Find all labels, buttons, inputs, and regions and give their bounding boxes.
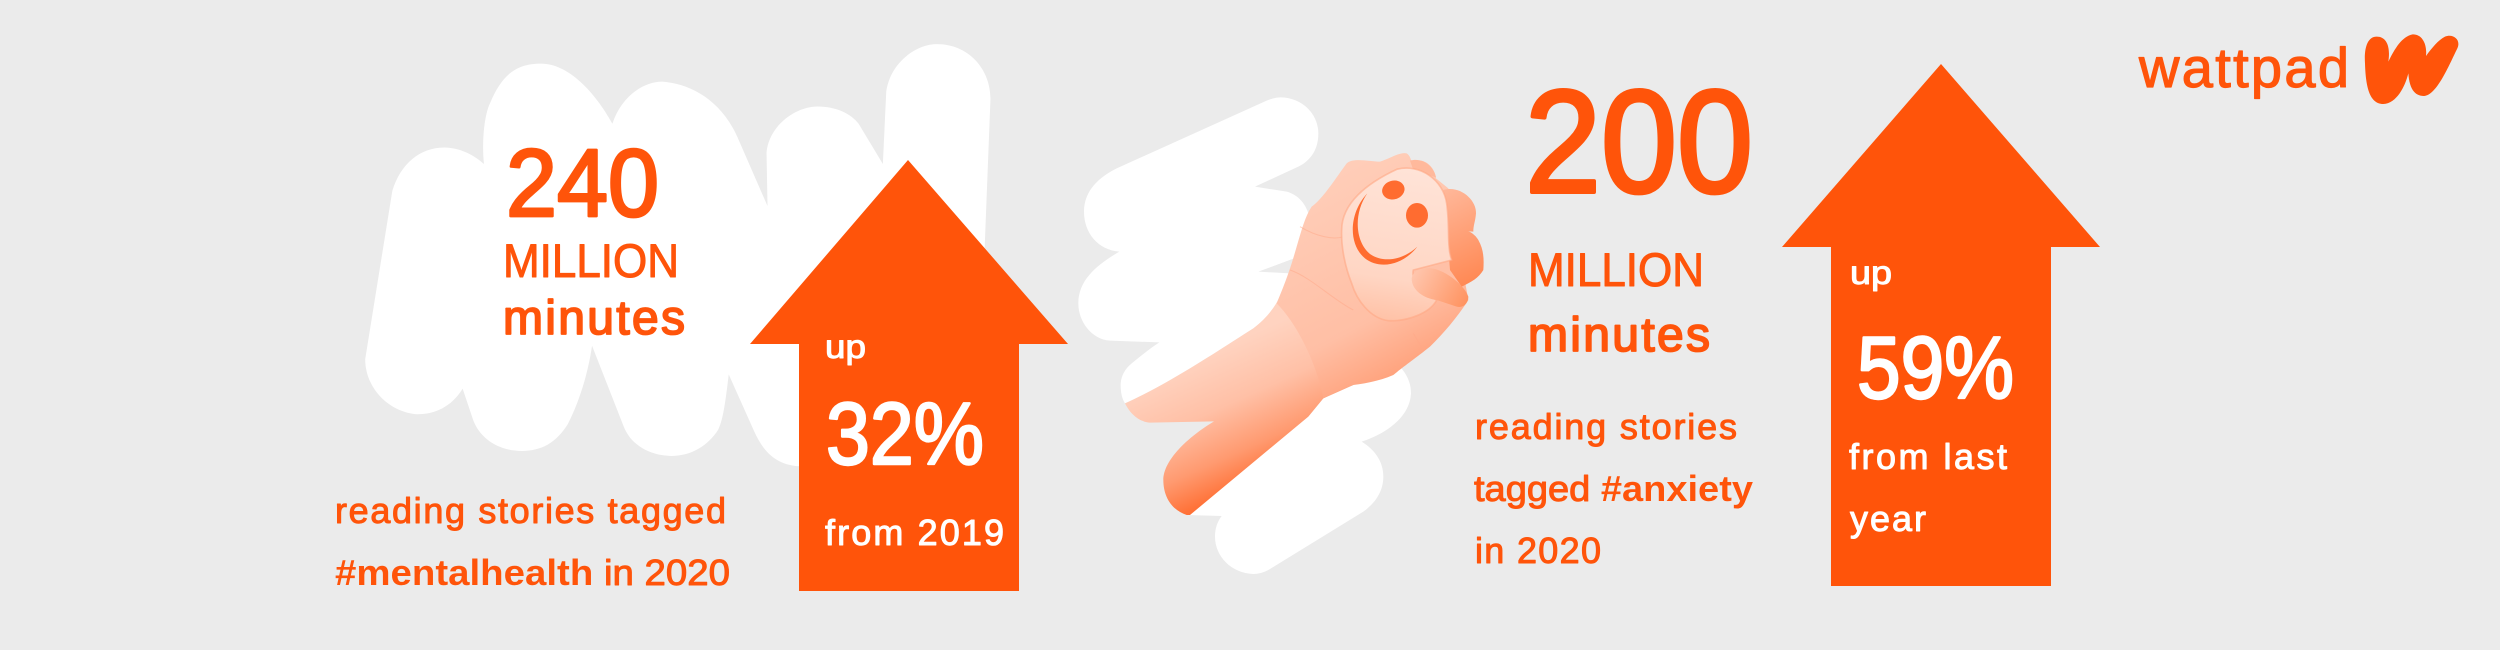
palm <box>1277 153 1468 398</box>
panel: anxiety statistic <box>1474 60 2100 586</box>
label MILLION: MILLION <box>503 234 679 287</box>
arrow: up 59%: from last <box>1849 436 2007 477</box>
big number 240: 240 <box>506 130 659 237</box>
description <box>1474 406 1753 571</box>
label minutes: minutes <box>1528 309 1710 362</box>
arrow: up 59%: 59% <box>1857 318 2014 417</box>
white scribble behind hand, lower <box>1187 367 1411 574</box>
big number 200: 200 <box>1525 60 1753 223</box>
white scribble behind 240 million <box>365 44 990 466</box>
ball smile <box>1353 193 1417 265</box>
ball eye left <box>1380 178 1407 202</box>
description: tagged #anxiety <box>1474 468 1753 509</box>
fingers <box>1410 160 1484 287</box>
arrow: up 59%: up <box>1850 254 1892 291</box>
description: in 2020 <box>1475 530 1601 571</box>
illustration: hand squeezing stress ball <box>1078 97 1484 574</box>
palm creases <box>1290 227 1423 352</box>
ball eye right <box>1406 203 1428 228</box>
description: #mentalhealth in 2020 <box>335 552 730 593</box>
arrow: up 32%: up <box>825 328 866 365</box>
thumb <box>1412 268 1468 307</box>
label minutes: minutes <box>503 292 685 345</box>
label MILLION: MILLION <box>1528 243 1704 296</box>
logo: wattpad <box>2138 34 2458 104</box>
arm silhouette <box>1125 297 1360 515</box>
arrow: up 59%: year <box>1850 498 1926 539</box>
white scribble behind hand, upper <box>1078 97 1327 403</box>
stress ball <box>1342 168 1452 321</box>
arrow: up 32%: 32% <box>826 384 984 483</box>
description: reading stories tagged <box>335 490 726 531</box>
arrow: up 59% <box>1782 64 2100 586</box>
wordmark: wattpad <box>2138 36 2349 99</box>
icon: W mark <box>2365 34 2458 104</box>
panel: mental health statistic <box>335 44 1068 593</box>
grey notch in scribble <box>1258 259 1293 273</box>
arrow: up 32% <box>750 160 1068 591</box>
arrow: up 32%: from 2019 <box>825 512 1004 553</box>
description: reading stories <box>1475 406 1737 447</box>
description <box>335 490 730 593</box>
